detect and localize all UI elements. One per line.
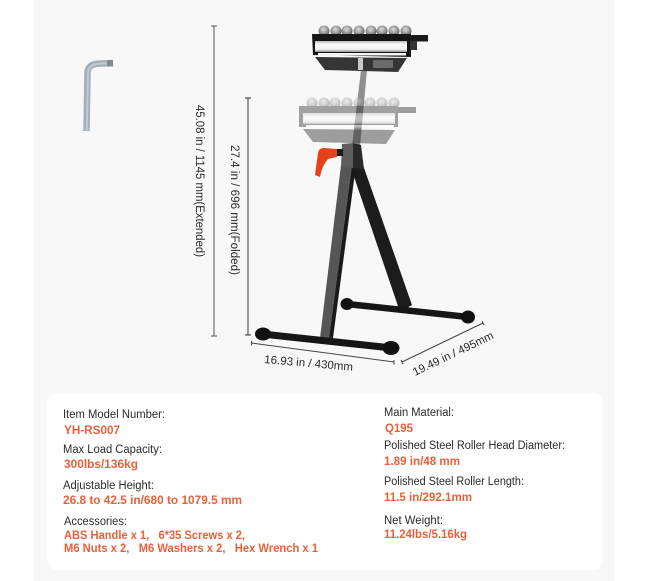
extended inner post xyxy=(352,70,367,146)
spec: roller head diameter: Polished Steel Roller Head Diameter: xyxy=(384,440,565,452)
roller head plate xyxy=(315,57,407,72)
spec: item model number xyxy=(63,409,165,437)
dimension line: extended height xyxy=(211,26,217,336)
specifications card xyxy=(47,393,603,570)
spec: max load capacity: 300lbs/136kg xyxy=(64,459,138,471)
spec: roller head diameter xyxy=(384,440,565,468)
spec: accessories: ABS Handle x 1, 6*35 Screws x 2, xyxy=(64,530,245,542)
roller head frame xyxy=(312,34,411,57)
spec: net weight: Net Weight: xyxy=(384,515,443,527)
roller stand illustration xyxy=(255,26,475,355)
spec: net weight: 11.24lbs/5.16kg xyxy=(384,529,467,541)
front tube xyxy=(320,165,356,338)
rear foot bar xyxy=(340,298,475,324)
spec: adjustable height xyxy=(63,480,242,507)
spec: main material: Q195 xyxy=(385,423,414,435)
spec: accessories xyxy=(64,516,319,555)
spec: roller head diameter: 1.89 in/48 mm xyxy=(384,456,460,468)
label: width: 16.93 in / 430mm xyxy=(264,354,353,374)
label: depth: 19.49 in / 495mm xyxy=(411,330,496,379)
dimension line: width xyxy=(251,341,394,364)
spec: max load capacity xyxy=(63,444,162,471)
ghost roller head: folded position xyxy=(299,98,416,144)
spec: accessories: Accessories: xyxy=(64,516,127,528)
spec: accessories: M6 Nuts x 2, M6 Washers x 2, Hex Wrench x 1 xyxy=(64,543,319,555)
collar xyxy=(341,143,364,169)
front foot bar xyxy=(255,328,400,355)
rear leg xyxy=(350,165,412,312)
label: folded height: 27.4 in / 696 mm(Folded) xyxy=(228,145,240,275)
spec: roller length: 11.5 in/292.1mm xyxy=(384,492,472,504)
dimension line: depth xyxy=(401,321,484,364)
spec: main material: Main Material: xyxy=(384,407,454,419)
spec: item model number: YH-RS007 xyxy=(64,425,120,437)
spec: item model number: Item Model Number: xyxy=(63,409,165,421)
spec: max load capacity: Max Load Capacity: xyxy=(63,444,162,456)
icon: hex wrench xyxy=(86,60,113,131)
spec: adjustable height: Adjustable Height: xyxy=(63,480,154,492)
label: extended height: 45.08 in / 1145 mm(Extended) xyxy=(193,105,205,257)
spec: roller length xyxy=(384,476,524,504)
roller balls xyxy=(318,26,412,36)
spec: adjustable height: 26.8 to 42.5 in/680 to 1079.5 mm xyxy=(63,495,242,507)
red handle xyxy=(315,148,343,177)
spec: main material xyxy=(384,407,454,435)
dimension line: folded height xyxy=(245,98,251,335)
spec: net weight xyxy=(384,515,467,541)
spec: roller length: Polished Steel Roller Length: xyxy=(384,476,524,488)
